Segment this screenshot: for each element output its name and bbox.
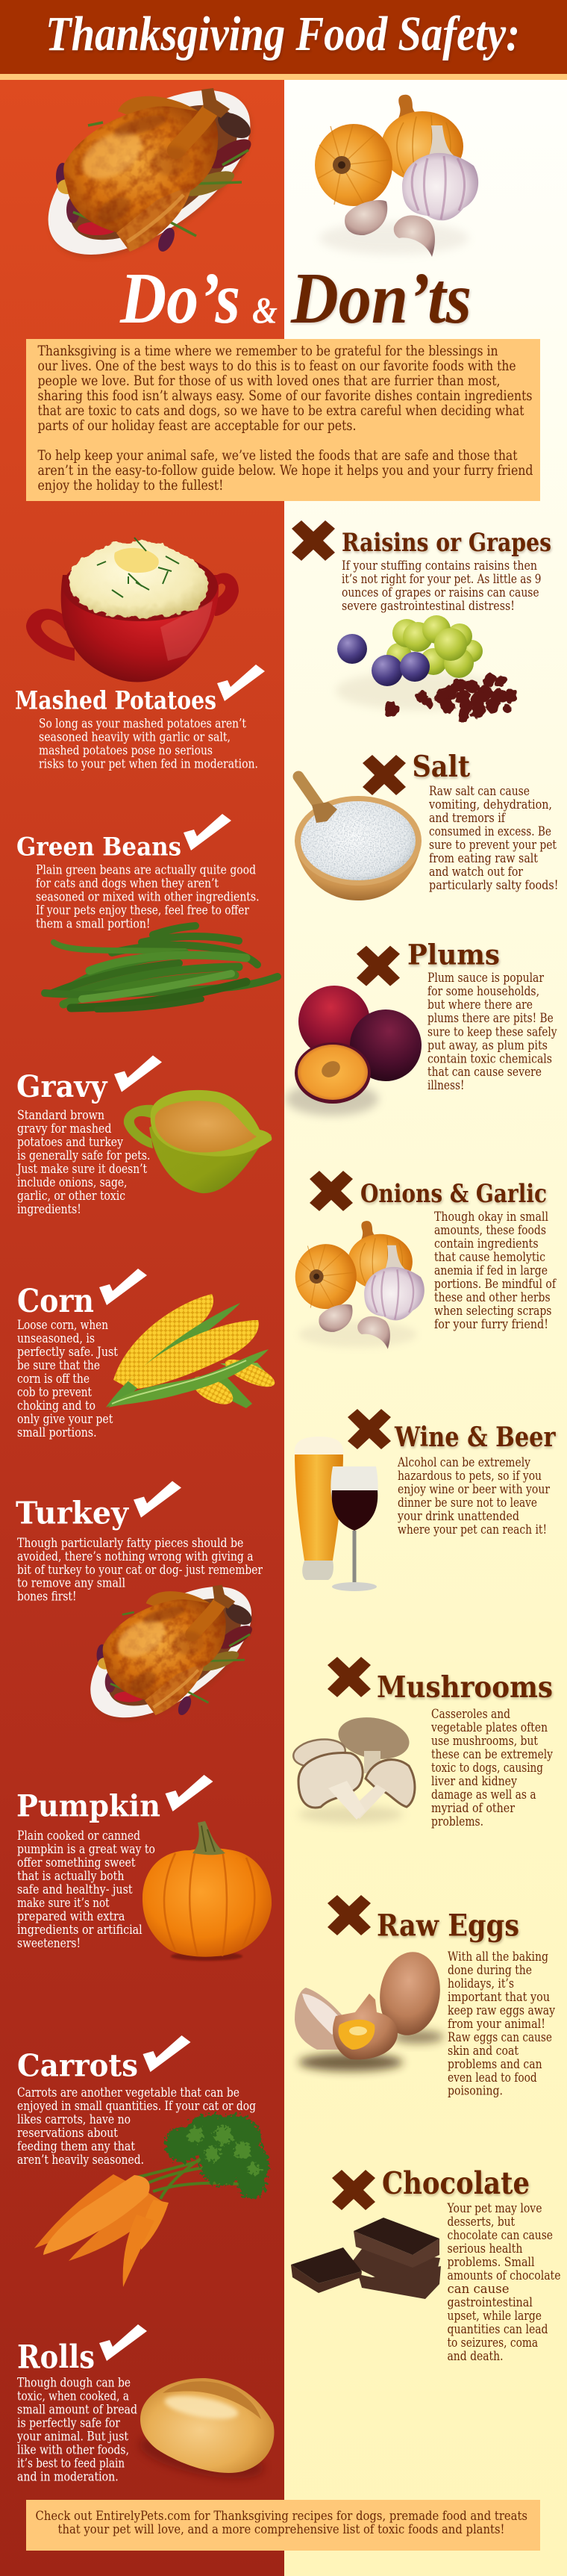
panel: raw eggs [295,1895,555,2098]
heading: Salt [412,750,470,784]
icon: check mark [217,665,265,701]
panel: plums [286,939,557,1116]
background: unsafe column [284,80,567,2576]
description: feeding them any that [17,2139,135,2154]
description: seasoned heavily with garlic or salt, [39,730,231,745]
heading: Gravy [16,1069,108,1104]
description [448,1950,555,2098]
description [17,1318,118,1440]
description: like with other foods, [17,2443,129,2458]
description: contain ingredients [434,1236,539,1251]
description: bit of turkey to your cat or dog- just remember [17,1563,263,1578]
intro text: enjoy the holiday to the fullest! [37,478,224,494]
description: sweeteners! [17,1936,81,1951]
panel: corn [17,1269,278,1440]
description: Carrots are another vegetable that can be [17,2085,239,2100]
description: serious health [448,2241,523,2256]
description: With all the baking [448,1950,548,1964]
description: If your pets enjoy these, feel free to offer [36,903,250,918]
description: problems and can [448,2057,542,2072]
description: quantities can lead [448,2322,548,2337]
image: pumpkin [142,1821,272,1961]
description: Standard brown [17,1108,104,1123]
description: pumpkin is a great way to [17,1842,155,1857]
description [36,863,260,932]
description: ingredients! [17,1202,81,1217]
description: likes carrots, have no [17,2112,131,2127]
icon: cross mark [328,1895,371,1935]
heading: Mashed Potatoes [15,686,216,716]
panel: onions and garlic [295,1171,557,1349]
panel: turkey [16,1481,275,1746]
heading: Do's & Don'ts: Do’s [119,258,240,339]
description: Casseroles and [431,1707,510,1722]
intro text: parts of our holiday feast are acceptable for our pets. [37,418,357,434]
header banner [0,0,567,80]
description: holidays, it’s [448,1976,514,1991]
callout: footer note: that your pet will love, and a more comprehensive list of toxic foods and plants! [58,2522,504,2537]
description: unseasoned, is [17,1331,95,1346]
description: Plain green beans are actually quite good [36,863,256,878]
description: for cats and dogs when they aren’t [36,877,219,892]
image: plums [286,986,422,1116]
heading: Green Beans [16,833,181,862]
heading: Turkey [16,1496,129,1531]
description: ingredients or artificial [17,1923,142,1938]
description: small portions. [17,1425,97,1440]
description: myriad of other [431,1801,516,1816]
icon: check mark [99,2324,147,2361]
image: corn cobs [106,1294,278,1410]
description: for your furry friend! [434,1317,548,1332]
description: aren’t heavily seasoned. [17,2153,144,2168]
description: Loose corn, when [17,1318,108,1333]
panel: rolls [16,2324,274,2487]
description: So long as your mashed potatoes aren’t [39,717,246,732]
description: done during the [448,1963,532,1978]
image: onions and garlic [315,95,478,257]
icon: cross mark [348,1409,391,1449]
description: bones first! [17,1589,76,1604]
heading: Pumpkin [16,1789,160,1824]
image: grapes and raisins [336,615,518,723]
icon: cross mark [310,1171,353,1211]
description: potatoes and turkey [17,1135,123,1150]
description: Just make sure it doesn’t [16,1162,147,1177]
icon: check mark [143,2035,191,2072]
description: is perfectly safe for [17,2416,121,2431]
panel: chocolate [291,2165,561,2364]
description [17,2085,256,2168]
description: poisoning. [448,2083,503,2098]
heading: Do's & Don'ts [119,258,472,339]
description: Plum sauce is popular [427,971,545,986]
background: safe column [0,80,284,2576]
description: dinner be sure not to leave [398,1496,537,1511]
panel: mushrooms [292,1657,553,1829]
description: that cause hemolytic [434,1250,545,1265]
description: choking and to [17,1399,95,1413]
panel: carrots [17,2035,269,2287]
description [16,1108,150,1217]
description: prepared with extra [17,1909,125,1924]
description: amounts, these foods [434,1223,546,1238]
icon: check mark [114,1056,162,1092]
image: beer and wine glasses [295,1437,378,1591]
description: damage as well as a [431,1788,536,1802]
description: corn is off the [17,1372,90,1387]
description: toxic, when cooked, a [17,2389,129,2404]
icon: check mark [184,814,231,850]
description: Raw salt can cause [429,784,530,799]
description: Though particularly fatty pieces should be [17,1536,243,1551]
image: mashed potatoes in red bowl [26,538,239,682]
description [430,1707,553,1829]
panel: raisins or grapes [292,520,551,723]
description: and tremors if [429,811,506,826]
description: and in moderation. [17,2470,119,2485]
description [427,971,557,1093]
description: from eating raw salt [429,851,538,866]
icon: check mark [166,1775,213,1811]
description: problems. Small [448,2255,534,2270]
description [17,1536,263,1604]
description: gravy for mashed [17,1121,112,1136]
heading: Raw Eggs [377,1908,519,1943]
icon: cross mark [332,2170,375,2210]
description: safe and healthy- just [17,1882,133,1897]
image: chocolate pieces [291,2218,441,2299]
description: your animal. But just [16,2430,128,2445]
description: problems. [431,1814,483,1829]
description: include onions, sage, [17,1175,127,1190]
description: can cause [448,2282,509,2297]
panel: wine and beer [295,1409,556,1591]
description: illness! [427,1078,464,1093]
icon: cross mark [292,520,335,561]
heading: Plums [407,939,500,971]
panel: mashed potatoes [15,538,265,772]
description: be sure that the [17,1358,100,1373]
description: upset, while large [448,2309,542,2324]
panel: salt [295,750,558,900]
description: to remove any small [17,1576,125,1591]
panel: green beans [16,814,278,1009]
icon: check mark [134,1481,181,1517]
description: Plain cooked or canned [17,1829,140,1844]
description: avoided, there’s nothing wrong with giving a [17,1549,254,1564]
description: make sure it’s not [17,1896,110,1911]
image: onions and garlic [295,1221,425,1349]
description: liver and kidney [431,1774,517,1789]
description [447,2201,561,2364]
image: roast turkey on plate [69,1561,275,1746]
image: gravy boat [124,1090,272,1193]
description [16,2376,137,2485]
panel: pumpkin [16,1775,272,1961]
icon: cross mark [363,755,406,795]
description: it’s best to feed plain [17,2457,125,2471]
description: mashed potatoes pose no serious [39,743,213,758]
icon: cross mark [328,1657,371,1697]
description: severe gastrointestinal distress! [342,599,515,614]
description: use mushrooms, but [431,1734,538,1749]
description: for some households, [427,984,539,999]
description: toxic to dogs, causing [431,1761,543,1776]
icon: check mark [99,1269,147,1305]
description: that is actually both [17,1869,125,1884]
heading: Carrots [17,2048,138,2084]
description: risks to your pet when fed in moderation. [39,757,258,772]
description: gastrointestinal [448,2295,533,2310]
description: perfectly safe. Just [17,1345,118,1360]
intro text [37,343,533,494]
description: skin and coat [448,2044,519,2059]
heading: Mushrooms [377,1670,553,1705]
description: Though dough can be [17,2376,131,2391]
description [342,559,542,614]
description: them a small portion! [36,917,151,932]
image: bowl of salt with scoop [295,777,422,900]
description: and watch out for [429,865,524,880]
image: roast turkey [20,58,280,290]
description: your drink unattended [397,1509,519,1524]
description: garlic, or other toxic [17,1189,125,1204]
description [39,717,258,772]
icon: cross mark [357,946,400,986]
image: bunch of carrots [34,2115,269,2287]
heading: Do's & Don'ts: & [252,289,278,331]
description [397,1455,551,1537]
description: but where there are [427,998,533,1012]
description: reservations about [17,2126,118,2141]
description: cob to prevent [17,1385,92,1400]
description: to seizures, coma [448,2336,538,2351]
description: enjoyed in small quantities. If your cat or dog [17,2099,256,2114]
image: green beans [45,926,278,1009]
callout: footer note [26,2500,540,2551]
description: even lead to food [448,2071,537,2085]
heading: Corn [17,1283,94,1320]
intro panel [26,339,540,501]
description: that can cause severe [427,1065,542,1080]
panel: gravy [16,1056,272,1217]
description [17,1829,155,1951]
description: is generally safe for pets. [17,1148,150,1163]
description: small amount of bread [17,2403,137,2418]
description: and death. [448,2349,503,2364]
image: eggs [295,1948,445,2071]
heading: Chocolate [382,2165,530,2201]
description: Alcohol can be extremely [397,1455,530,1470]
heading: Do's & Don'ts: Don’ts [290,258,472,339]
description: offer something sweet [17,1855,136,1870]
image: mushrooms [292,1712,415,1823]
description: from your animal! [448,2017,545,2032]
image: bread roll [136,2378,274,2487]
description [428,784,558,893]
description: only give your pet [17,1412,113,1427]
description [434,1210,557,1332]
description: put away, as plum pits [427,1038,548,1053]
description: important that you [448,1990,550,2005]
heading: Rolls [17,2339,95,2376]
intro text: Thanksgiving is a time where we remember to be grateful for the blessings in [37,343,498,359]
description: desserts, but [448,2215,515,2230]
description: Your pet may love [447,2201,542,2216]
description: seasoned or mixed with other ingredients. [36,889,260,904]
